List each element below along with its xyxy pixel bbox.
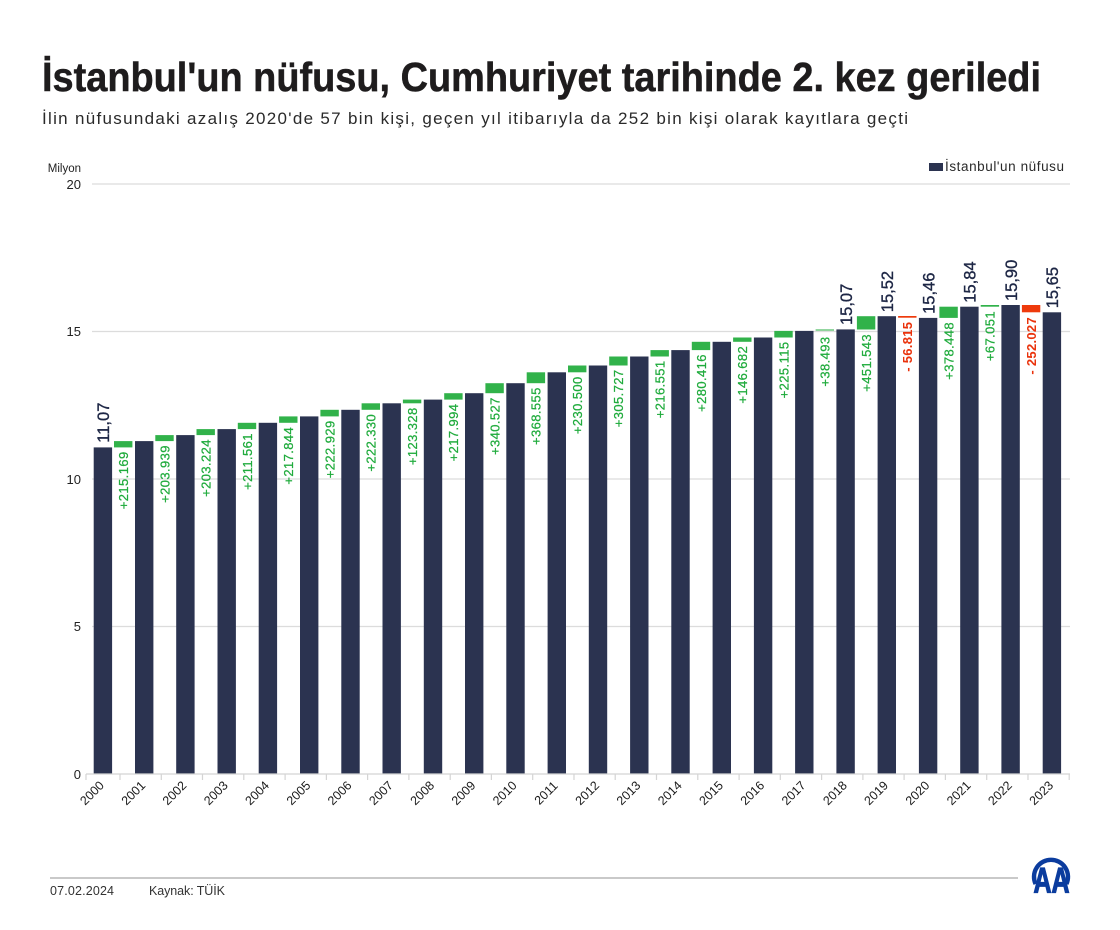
increase labels: +217.844 <box>281 427 296 485</box>
x axis: 2010 <box>490 778 520 808</box>
x axis: 2023 <box>1027 778 1056 808</box>
increase labels: +215.169 <box>116 451 131 509</box>
x axis: 2000 <box>77 778 107 808</box>
x axis: 2017 <box>779 778 809 808</box>
increase labels: +38.493 <box>818 336 833 387</box>
value labels: 11,07 <box>95 403 113 443</box>
x axis: 2004 <box>242 778 272 808</box>
icon: AA logo <box>1034 860 1070 900</box>
icon: AA logo: AA <box>1034 862 1070 900</box>
increase labels: +222.330 <box>364 414 379 472</box>
x axis: 2011 <box>532 779 561 808</box>
increase labels: +230.500 <box>570 376 585 434</box>
decrease blocks <box>898 305 1040 318</box>
x axis: 2009 <box>449 778 478 808</box>
x axis: 2001 <box>119 778 148 808</box>
increase labels: +67.051 <box>983 311 998 361</box>
y axis: 15 <box>67 324 81 339</box>
increase labels: +222.929 <box>322 420 337 478</box>
x axis: 2006 <box>325 778 355 808</box>
y axis: 0 <box>74 767 81 782</box>
x axis: 2019 <box>861 778 891 808</box>
y axis: 10 <box>67 472 81 487</box>
increase labels: +217.994 <box>446 404 461 461</box>
decrease labels <box>900 317 1039 375</box>
increase labels: +340.527 <box>487 397 502 455</box>
x axis: 2005 <box>284 778 313 808</box>
increase labels: +203.224 <box>198 439 214 497</box>
value labels: 15,65 <box>1044 267 1062 308</box>
y axis: Milyon <box>48 163 81 175</box>
value labels: 15,07 <box>838 284 856 325</box>
x axis: 2015 <box>696 778 726 808</box>
title: İstanbul'un nüfusu, Cumhuriyet tarihinde 2. kez geriledi <box>42 54 1041 100</box>
x axis: 2021 <box>944 778 974 808</box>
x axis: 2012 <box>573 778 602 808</box>
x axis: 2014 <box>655 778 685 808</box>
value labels: 15,46 <box>920 273 938 314</box>
increase labels: +368.555 <box>529 387 544 445</box>
value labels: 15,52 <box>879 271 897 312</box>
increase labels: +146.682 <box>735 346 750 404</box>
x axis: 2003 <box>201 778 231 808</box>
increase labels: +211.561 <box>240 433 255 490</box>
x axis: 2018 <box>820 778 850 808</box>
increase blocks <box>114 305 999 447</box>
x axis: 2022 <box>985 778 1015 808</box>
increase labels <box>116 311 998 509</box>
increase labels: +378.448 <box>941 322 956 380</box>
footer date: 07.02.2024 <box>50 884 114 898</box>
increase labels: +123.328 <box>405 407 420 465</box>
y axis: 20 <box>67 177 81 192</box>
x axis: 2020 <box>903 778 932 808</box>
y axis: 5 <box>74 619 81 634</box>
increase labels: +305.727 <box>611 370 626 427</box>
y axis <box>48 163 81 782</box>
decrease labels: - 252.027 <box>1024 317 1039 375</box>
increase labels: +280.416 <box>694 354 709 412</box>
decrease labels: - 56.815 <box>900 322 915 372</box>
increase labels: +451.543 <box>859 334 874 392</box>
x axis <box>77 774 1070 808</box>
increase labels: +225.115 <box>776 342 791 398</box>
footer source: Kaynak: TÜİK <box>149 884 226 898</box>
x axis: 2002 <box>160 778 189 808</box>
increase labels: +203.939 <box>157 445 172 503</box>
value labels: 15,84 <box>962 261 980 303</box>
x axis: 2016 <box>738 778 767 808</box>
legend: İstanbul'un nüfusu <box>945 159 1064 174</box>
value labels <box>95 260 1062 443</box>
x axis: 2013 <box>614 778 643 808</box>
increase labels: +216.551 <box>652 360 668 418</box>
x axis: 2007 <box>366 778 396 808</box>
x axis: 2008 <box>408 778 437 808</box>
population bars <box>94 305 1061 774</box>
value labels: 15,90 <box>1003 260 1021 301</box>
subtitle: İlin nüfusundaki azalış 2020'de 57 bin kişi, geçen yıl itibarıyla da 252 bin kişi olarak kayıtlara geçti <box>42 109 908 128</box>
